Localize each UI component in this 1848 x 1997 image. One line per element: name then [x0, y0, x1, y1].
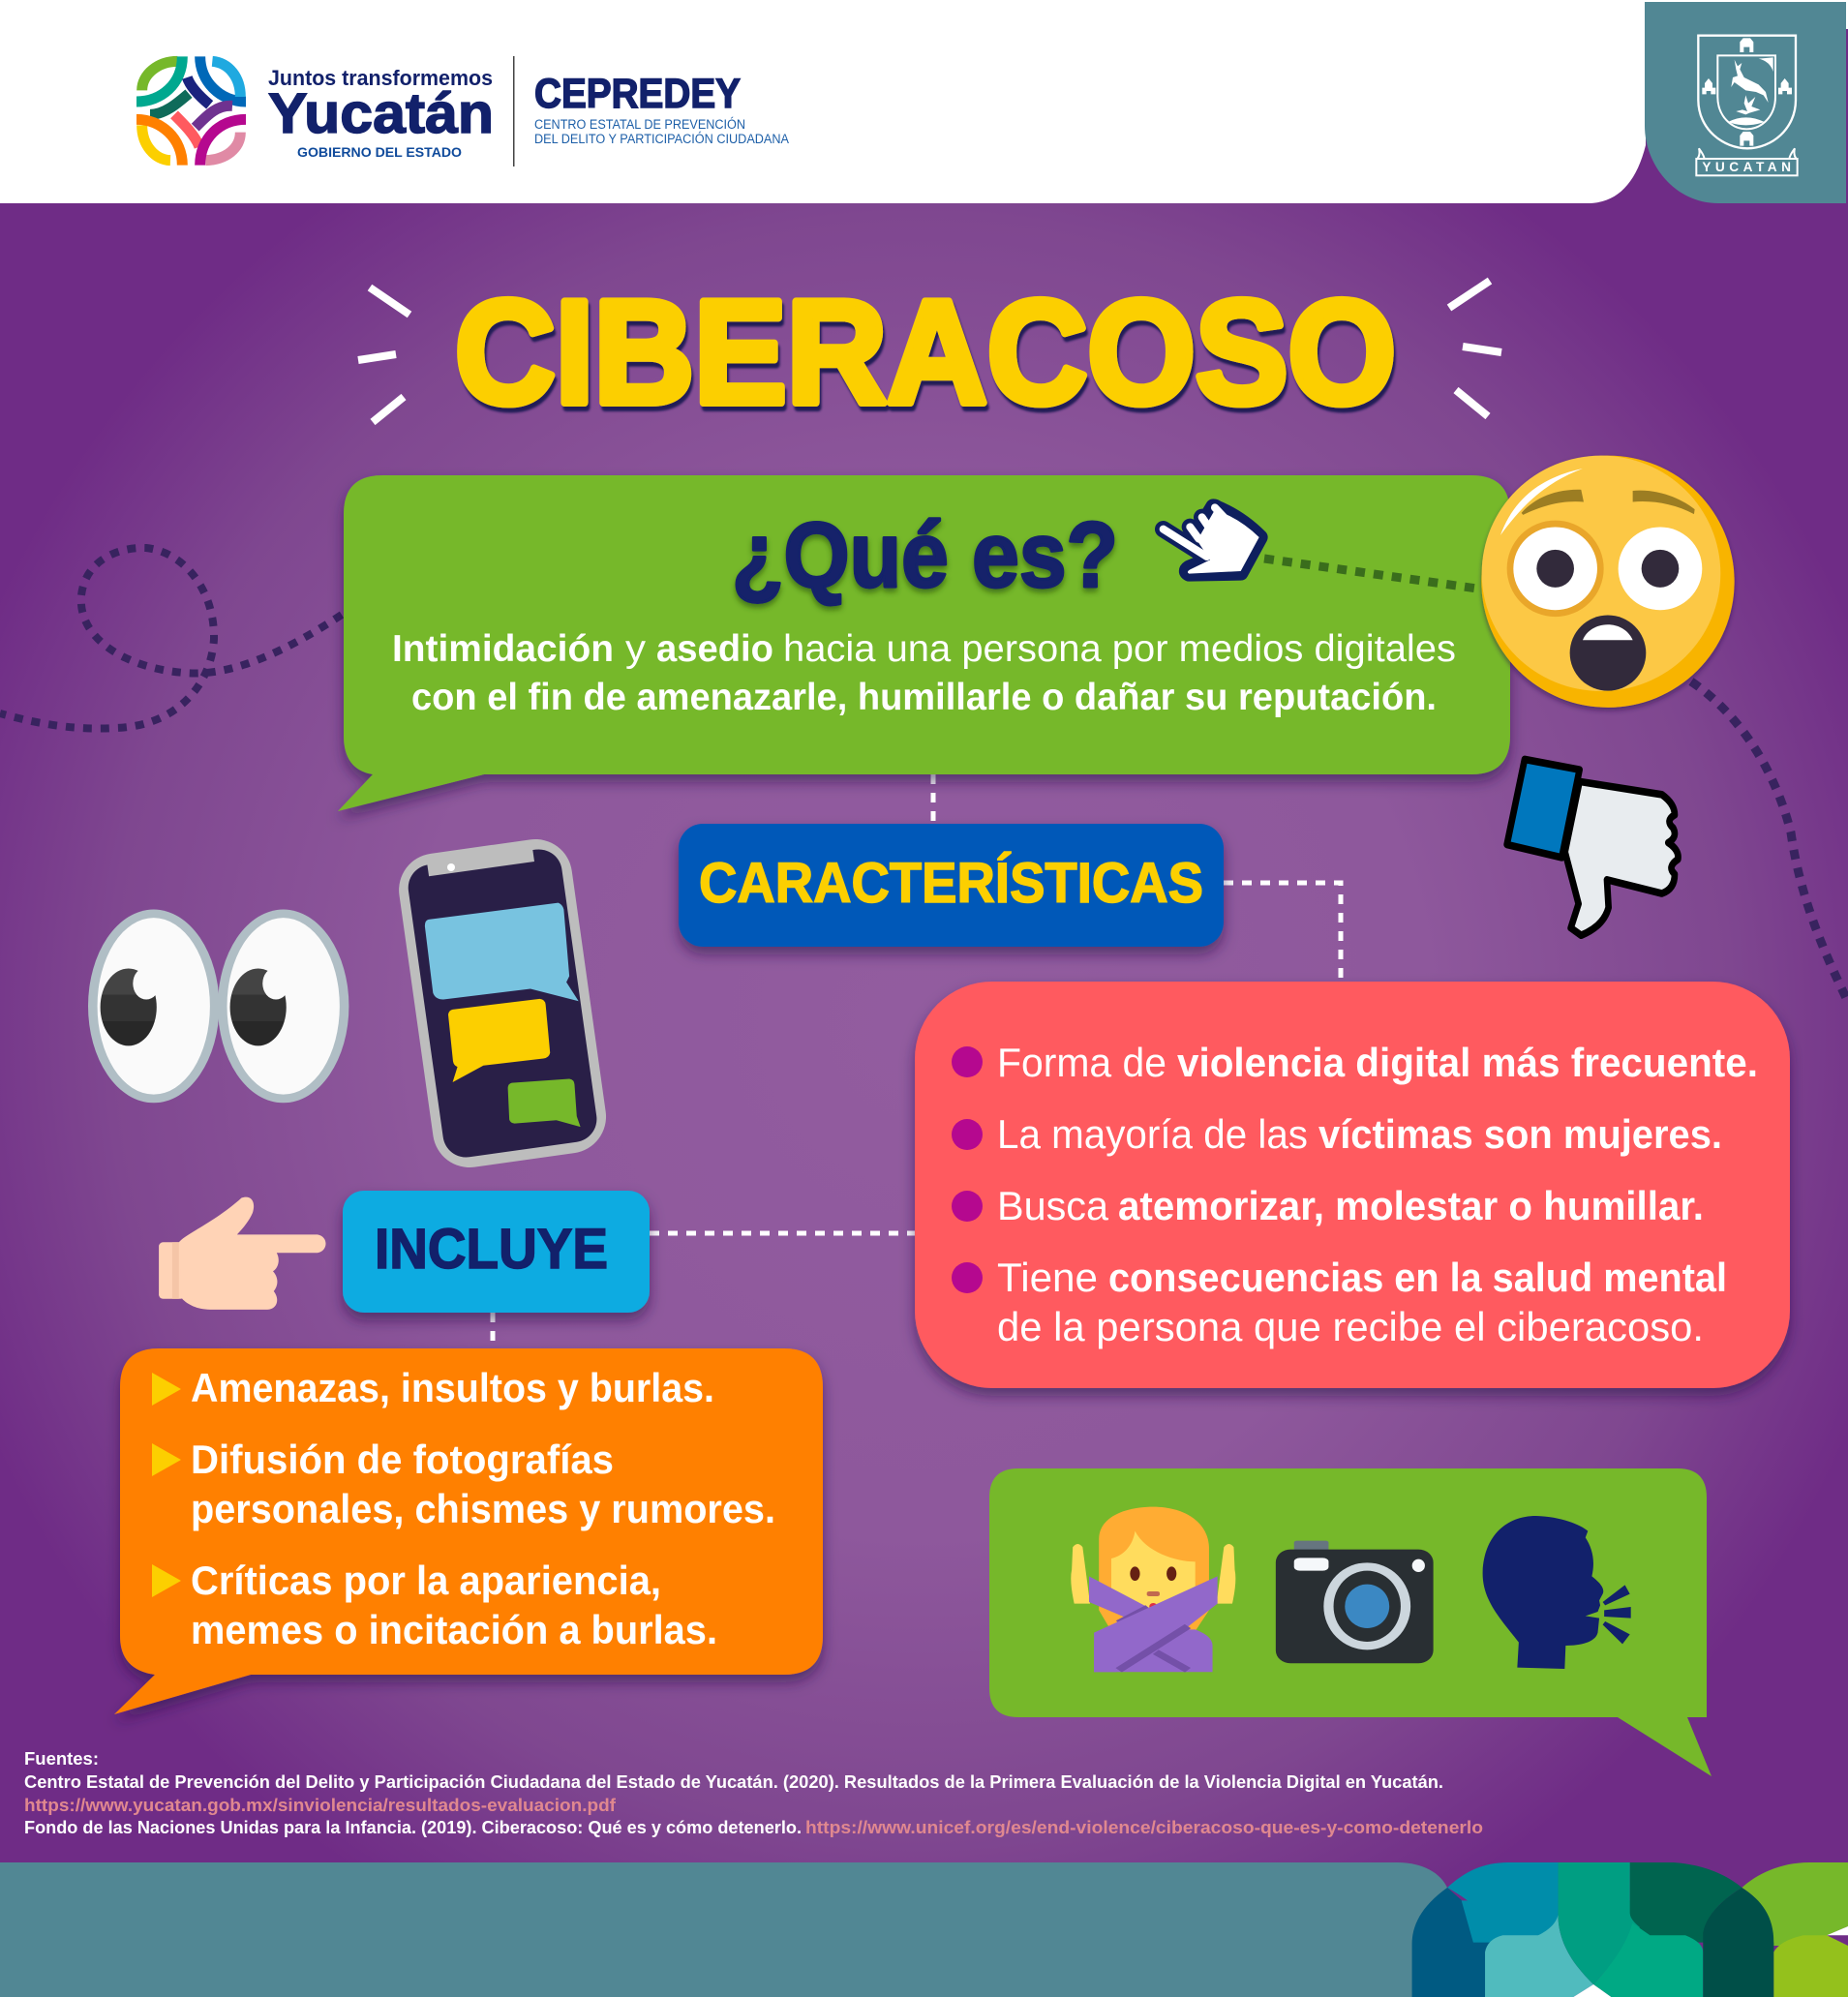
characteristics text: Tiene: [997, 1255, 1098, 1300]
includes text: memes o incitación a burlas.: [191, 1607, 717, 1652]
panel: characteristics list: [915, 982, 1790, 1388]
bullet dots: [952, 1046, 983, 1293]
definition text: y: [625, 628, 647, 670]
characteristics text: La mayoría de las: [997, 1111, 1308, 1157]
characteristics text: víctimas son mujeres.: [1318, 1111, 1722, 1157]
characteristics text: de la persona que recibe el ciberacoso.: [997, 1304, 1704, 1349]
sources text: [24, 1749, 1483, 1837]
characteristics text: consecuencias en la salud mental: [1108, 1255, 1727, 1300]
title accent ticks: [358, 281, 1501, 422]
badge text: YUCATAN: [1702, 160, 1791, 174]
icon: speaking head: [1483, 1516, 1631, 1669]
icon: eyes: [88, 910, 348, 1103]
includes text: Amenazas, insultos y burlas.: [191, 1365, 714, 1410]
icon: shocked emoji: [1481, 456, 1735, 708]
definition text: [392, 628, 1456, 718]
definition text: Intimidación: [392, 628, 614, 670]
bullet arrows: [152, 1373, 181, 1597]
panel: ¿Qué es? definition bubble: [338, 475, 1510, 811]
icon: woman crossing arms: [1071, 1507, 1235, 1672]
includes text: personales, chismes y rumores.: [191, 1486, 775, 1531]
sources text: Fondo de las Naciones Unidas para la Infancia. (2019). Ciberacoso: Qué es y cómo detenerlo.: [24, 1818, 802, 1837]
label: INCLUYE: INCLUYE: [375, 1218, 608, 1281]
icon: thumbs down: [1507, 759, 1679, 935]
characteristics text: Busca: [997, 1183, 1109, 1228]
sources text: Fuentes:: [24, 1749, 99, 1769]
footer band with logo shapes: [0, 1862, 1848, 1997]
badge: Yucatán coat of arms: [1645, 2, 1846, 203]
includes text: Críticas por la apariencia,: [191, 1558, 661, 1603]
includes text: Difusión de fotografías: [191, 1437, 614, 1482]
label: CARACTERÍSTICAS: CARACTERÍSTICAS: [699, 852, 1203, 915]
label: CARACTERÍSTICAS: [679, 824, 1224, 947]
characteristics text: Forma de: [997, 1040, 1166, 1085]
title: CIBERACOSO: [455, 270, 1396, 435]
characteristics text: violencia digital más frecuente.: [1177, 1040, 1758, 1085]
logo text: Centro Estatal de Prevención: CENTRO ESTATAL DE PREVENCIÓN: [534, 117, 745, 132]
header band: [0, 0, 1848, 203]
icon: pointing hand cursor: [1164, 506, 1260, 574]
heading: ¿Qué es?: ¿Qué es?: [732, 503, 1118, 607]
footer emblem shapes: [1412, 1862, 1848, 1997]
icon: phone with chat bubbles: [394, 834, 611, 1172]
logo text: Yucatán: Yucatán: [268, 82, 494, 145]
label: INCLUYE: [343, 1191, 650, 1313]
sources text: Centro Estatal de Prevención del Delito y Participación Ciudadana del Estado de Yucatán. (2020). Resultados de la Primera Evaluación de la Violencia Digital en Yucatán.: [24, 1772, 1443, 1792]
characteristics text: [997, 1040, 1758, 1349]
logo text: Juntos transformemos: Juntos transformemos: [268, 66, 493, 90]
logo text: Gobierno del Estado: GOBIERNO DEL ESTADO: [297, 145, 462, 160]
panel: green icon speech bubble: [989, 1468, 1712, 1776]
sources text: https://www.yucatan.gob.mx/sinviolencia/resultados-evaluacion.pdf: [24, 1796, 617, 1815]
connector lines: [493, 774, 1341, 1348]
logo text: CEPREDEY: CEPREDEY: [534, 71, 741, 117]
logo text: Del delito y participación ciudadana: DEL DELITO Y PARTICIPACIÓN CIUDADANA: [534, 132, 789, 146]
panel: includes list: [114, 1348, 823, 1714]
definition text: hacia una persona por medios digitales: [783, 628, 1456, 670]
characteristics text: atemorizar, molestar o humillar.: [1118, 1183, 1704, 1228]
definition text: con el fin de amenazarle, humillarle o dañar su reputación.: [411, 677, 1437, 718]
sources text: https://www.unicef.org/es/end-violence/ciberacoso-que-es-y-como-detenerlo: [805, 1818, 1483, 1837]
icon: pointing hand: [159, 1197, 326, 1310]
includes text: [191, 1365, 775, 1652]
icon: camera: [1276, 1541, 1434, 1663]
definition text: asedio: [656, 628, 773, 670]
logo: Yucatán emblem: [136, 56, 246, 166]
